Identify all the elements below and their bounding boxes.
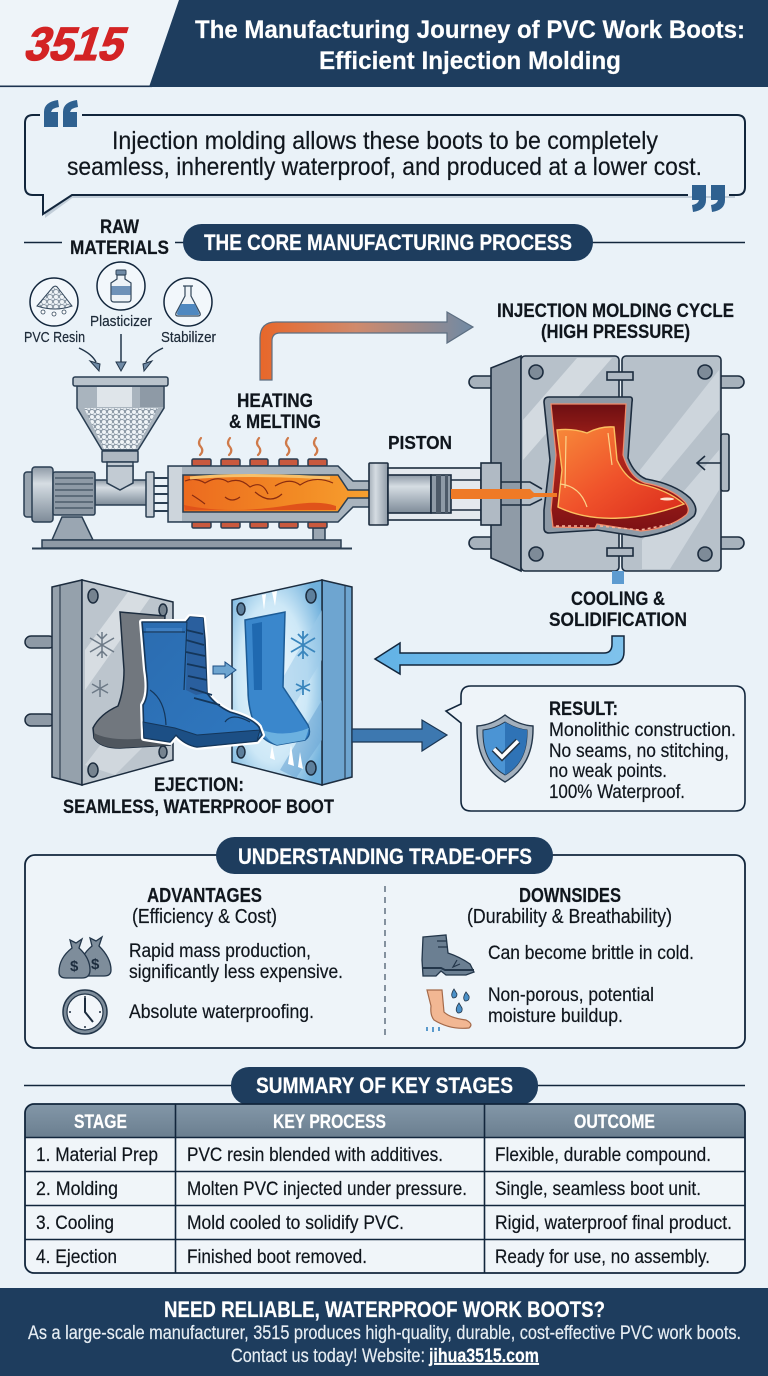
logo: 3515: 3515 <box>19 18 134 71</box>
label: raw materials: MATERIALS <box>70 238 169 259</box>
icon: money bags <box>59 937 111 978</box>
section heading: the core manufacturing process: THE CORE MANUFACTURING PROCESS <box>204 230 572 255</box>
ejection scene <box>25 580 352 785</box>
icon: foot with moisture <box>427 989 471 1032</box>
molten PVC <box>183 475 370 512</box>
label: heating and melting <box>229 391 321 433</box>
icon: money bags: $ <box>91 956 100 973</box>
mold plates <box>491 356 729 571</box>
row 1: PVC resin blended with additives. <box>187 1144 443 1166</box>
label: ejection: SEAMLESS, WATERPROOF BOOT <box>63 797 334 818</box>
extruder machine <box>24 459 370 548</box>
column heading: advantages <box>132 885 277 928</box>
row 2: Single, seamless boot unit. <box>495 1178 701 1200</box>
section rule: summary <box>24 1084 745 1086</box>
row 1: Flexible, durable compound. <box>495 1144 711 1166</box>
icon: stabilizer flask <box>164 278 212 326</box>
machine base <box>32 517 352 548</box>
footer contact: Contact us today! Website: <box>231 1346 425 1367</box>
left snowflakes <box>90 632 114 697</box>
column heading: downsides: DOWNSIDES <box>519 885 621 907</box>
right mold half <box>232 580 352 785</box>
text: rapid mass production <box>129 941 343 983</box>
label: ejection: EJECTION: <box>154 775 244 796</box>
row 2: Molten PVC injected under pressure. <box>187 1178 467 1200</box>
table header row: KEY PROCESS <box>273 1112 386 1133</box>
quote callout <box>25 100 745 216</box>
label: piston: PISTON <box>388 433 452 453</box>
label: ejection <box>63 775 334 818</box>
injection mold <box>369 356 744 571</box>
column heading: downsides: (Durability & Breathability) <box>467 906 672 928</box>
label: heating and melting: HEATING <box>237 391 313 412</box>
text: non-porous <box>488 985 654 1027</box>
row 4: Finished boot removed. <box>187 1246 367 1268</box>
title: The Manufacturing Journey of PVC Work Boots: <box>195 16 745 44</box>
finished blue boot <box>142 617 262 747</box>
hopper <box>73 377 168 490</box>
row 3: Rigid, waterproof final product. <box>495 1212 732 1234</box>
flames <box>199 438 317 455</box>
table header row: OUTCOME <box>574 1112 655 1133</box>
title <box>195 16 745 75</box>
result text: No seams, no stitching, <box>549 741 729 762</box>
row 1 <box>36 1144 711 1166</box>
row 1: 1. Material Prep <box>36 1144 158 1166</box>
label: injection molding cycle: (HIGH PRESSURE) <box>541 322 690 343</box>
heading: understanding trade-offs <box>216 837 553 874</box>
label: injection molding cycle <box>497 301 734 343</box>
icon: clock <box>63 990 107 1034</box>
molten boot dark mold <box>551 404 688 531</box>
label: heating and melting: & MELTING <box>229 412 321 433</box>
label: cooling and solidification: COOLING & <box>571 589 665 610</box>
icon: brittle boot <box>422 935 474 976</box>
row 2: 2. Molding <box>36 1178 118 1200</box>
row 2 <box>36 1178 701 1200</box>
left mold half <box>25 580 173 785</box>
result text <box>549 699 736 803</box>
row 4 <box>36 1246 710 1268</box>
blue boot impression <box>245 612 309 745</box>
label: cooling and solidification <box>549 589 687 631</box>
text: non-porous: Non-porous, potential <box>488 985 654 1006</box>
label: cooling and solidification: SOLIDIFICATION <box>549 610 687 631</box>
icon: plasticizer bottle <box>97 262 145 310</box>
quote text <box>67 127 702 181</box>
label: raw materials <box>70 217 169 259</box>
label: PVC resin: PVC Resin <box>24 329 85 346</box>
header band <box>0 0 768 87</box>
section rule: core process <box>24 242 745 244</box>
quote text: Injection molding allows these boots to be completely <box>112 127 658 155</box>
row 3: 3. Cooling <box>36 1212 114 1234</box>
text: brittle in cold: Can become brittle in cold. <box>488 943 694 964</box>
arrow: cooling to ejection <box>375 636 624 674</box>
label: raw materials: RAW <box>100 217 139 238</box>
injection stream <box>451 489 557 499</box>
result text: Monolithic construction. <box>549 720 736 741</box>
section heading: summary of key stages <box>231 1067 538 1105</box>
label: injection molding cycle: INJECTION MOLDING CYCLE <box>497 301 734 322</box>
heading: understanding trade-offs: UNDERSTANDING TRADE-OFFS <box>238 844 532 869</box>
icon: PVC resin <box>30 278 78 326</box>
table header row <box>25 1104 745 1137</box>
opening quote mark <box>44 100 78 127</box>
molten boot core <box>556 427 684 530</box>
icon: shield <box>477 715 533 782</box>
result text: RESULT: <box>549 699 618 720</box>
text: rapid mass production: significantly less expensive. <box>129 962 343 983</box>
column heading: downsides <box>467 885 672 928</box>
title: Efficient Injection Molding <box>319 47 621 75</box>
small transfer arrow <box>213 662 236 678</box>
table: summary of key stages <box>25 1104 745 1273</box>
footer heading: NEED RELIABLE, WATERPROOF WORK BOOTS? <box>164 1297 605 1322</box>
row 4: 4. Ejection <box>36 1246 117 1268</box>
piston <box>369 463 542 525</box>
result text: no weak points. <box>549 761 667 782</box>
section heading: summary of key stages: SUMMARY OF KEY STAGES <box>256 1073 513 1098</box>
mold boot cavity <box>544 397 696 537</box>
connector: mold to cooling <box>612 571 624 584</box>
panel: trade-offs <box>25 837 745 1048</box>
label: stabilizer: Stabilizer <box>161 329 216 346</box>
right snowflakes <box>291 631 315 695</box>
table header row: STAGE <box>74 1112 127 1133</box>
icon: money bags: $ <box>70 958 79 975</box>
column heading: advantages: ADVANTAGES <box>147 885 262 907</box>
row 3: Mold cooled to solidify PVC. <box>187 1212 404 1234</box>
guide rods <box>469 376 744 549</box>
arrow: heating to injection <box>260 312 473 380</box>
footer <box>0 1288 768 1376</box>
row 4: Ready for use, no assembly. <box>495 1246 710 1268</box>
label: plasticizer: Plasticizer <box>90 313 152 330</box>
quote text: seamless, inherently waterproof, and produced at a lower cost. <box>67 153 702 181</box>
arrows: materials into hopper <box>79 334 163 371</box>
row 3 <box>36 1212 732 1234</box>
arrow: ejection to result <box>352 720 447 751</box>
heater bands <box>192 459 327 528</box>
column heading: advantages: (Efficiency & Cost) <box>132 906 277 928</box>
closing quote mark <box>692 185 725 212</box>
panel: result <box>446 686 745 811</box>
text: non-porous: moisture buildup. <box>488 1006 623 1027</box>
motor <box>24 466 168 522</box>
section heading: the core manufacturing process <box>183 224 593 261</box>
result text: 100% Waterproof. <box>549 782 685 803</box>
footer contact: jihua3515.com <box>428 1346 539 1367</box>
icicles <box>262 591 303 769</box>
text: absolute waterproofing: Absolute waterproofing. <box>129 1002 314 1023</box>
text: rapid mass production: Rapid mass production, <box>129 941 311 962</box>
gray boot impression <box>93 612 170 748</box>
barrel <box>168 466 370 522</box>
